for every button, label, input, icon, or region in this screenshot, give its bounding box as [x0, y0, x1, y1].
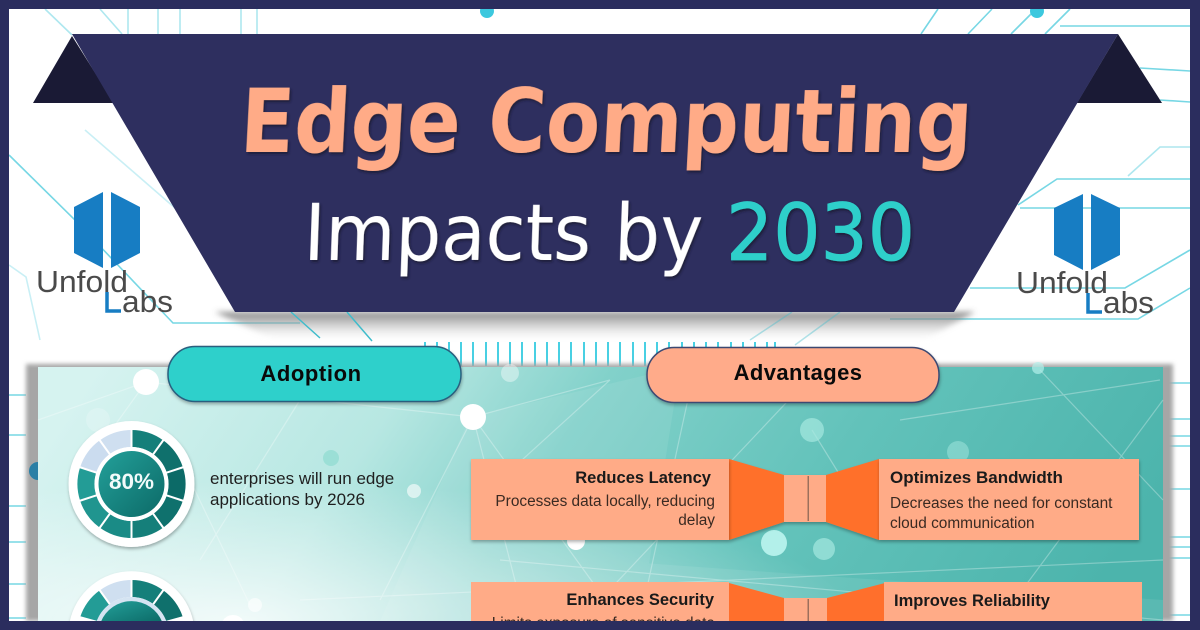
- title year: 2030: [726, 189, 915, 279]
- banner left fold: [33, 36, 114, 103]
- advantage row 1: [471, 459, 1139, 540]
- slanted circuit traces below banner: [291, 312, 840, 345]
- circuit node on shadow: [29, 462, 47, 480]
- heading: advantages: Advantages: [734, 360, 862, 385]
- circuit node top left: [480, 4, 494, 18]
- card: enhances security: [471, 582, 729, 630]
- network lines: [38, 367, 1163, 620]
- card: improves reliability: [884, 582, 1142, 621]
- banner shadow: [215, 312, 975, 342]
- logo right: [1016, 194, 1154, 320]
- advantage row 2: [471, 582, 1142, 630]
- stat: 80%: [68, 421, 394, 547]
- card: reduces latency: Reduces Latency: [575, 469, 712, 487]
- texture facets: [380, 367, 1163, 621]
- card: reduces latency: Processes data locally, reducing: [495, 493, 715, 510]
- logo mark: [74, 192, 140, 268]
- stat description: applications by 2026: [210, 490, 365, 509]
- panel shadow: [26, 364, 1173, 621]
- card: reduces latency: delay: [678, 512, 715, 529]
- connector: [729, 583, 885, 621]
- stat: second donut: [70, 571, 193, 622]
- title banner: [33, 34, 1162, 312]
- card: enhances security: Enhances Security: [566, 591, 715, 609]
- card: optimizes bandwidth: cloud communication: [890, 515, 1035, 532]
- banner body: [72, 34, 1118, 312]
- donut: 80%: [109, 469, 154, 494]
- connector: [729, 459, 879, 540]
- stat description: enterprises will run edge: [210, 469, 394, 488]
- card: optimizes bandwidth: Decreases the need for constant: [890, 495, 1113, 512]
- logo left: abs: [122, 284, 173, 319]
- network nodes: [86, 362, 1044, 621]
- circuit ticks strip: [425, 342, 775, 366]
- heading: adoption: [168, 346, 461, 402]
- title line 1: Edge Computing: [238, 70, 975, 173]
- heading: advantages: [647, 348, 939, 402]
- circuit node top right: [1030, 4, 1044, 18]
- title line 2: Impacts by: [302, 189, 704, 279]
- banner right fold: [1077, 34, 1162, 103]
- card: reduces latency: [471, 459, 729, 540]
- heading: adoption: Adoption: [260, 361, 362, 386]
- donut: [68, 421, 194, 547]
- card: optimizes bandwidth: [879, 459, 1139, 540]
- logo mark: [1054, 194, 1120, 270]
- card: improves reliability: Improves Reliability: [894, 592, 1051, 610]
- logo wordmark: Unfold: [36, 264, 128, 299]
- card: optimizes bandwidth: Optimizes Bandwidth: [890, 468, 1063, 487]
- logo left: [36, 192, 173, 319]
- logo right: abs: [1103, 285, 1154, 320]
- logo wordmark: Unfold: [1016, 265, 1108, 300]
- content panel: [38, 362, 1163, 621]
